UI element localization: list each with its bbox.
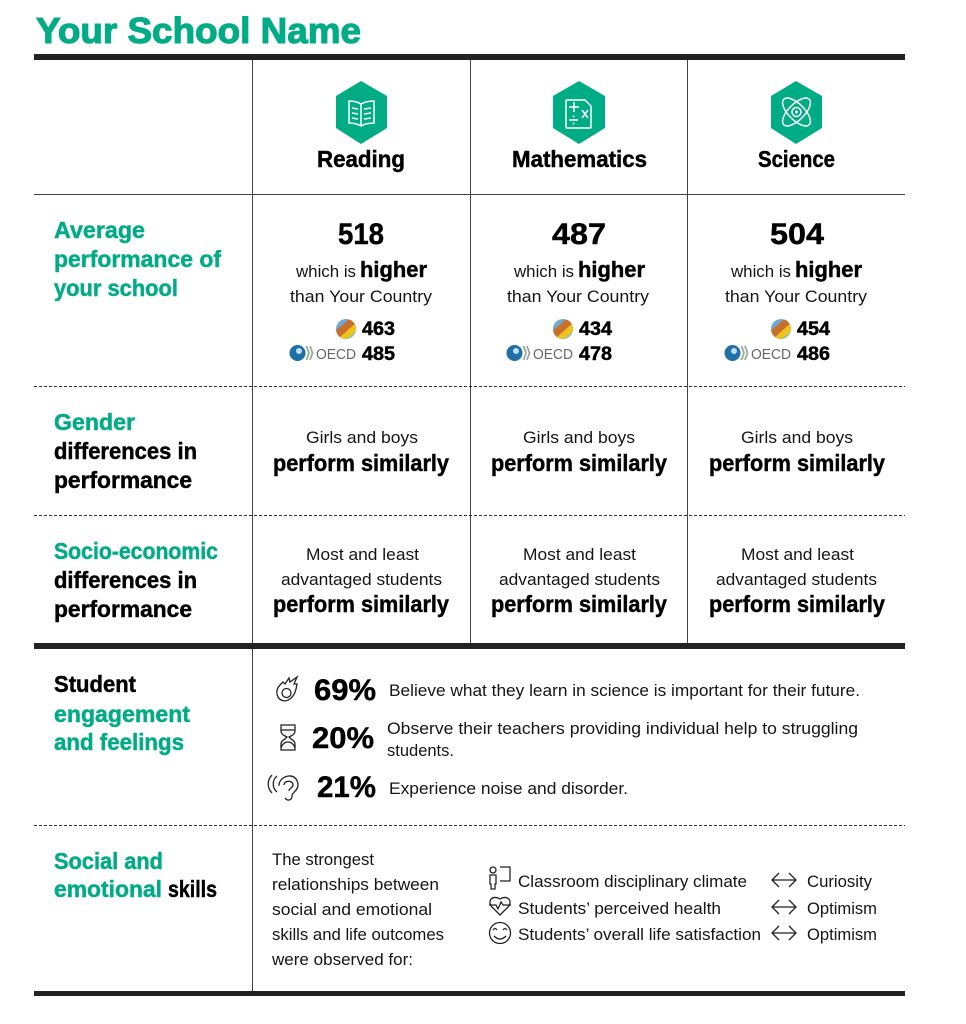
row heading: gender differences: Gender: [54, 409, 135, 435]
icon: OECD logo: [506, 345, 573, 363]
icon: ear: [268, 775, 298, 800]
engagement stat: 20%: students.: [387, 741, 454, 760]
column header: Science: [758, 81, 835, 172]
row heading: gender differences: performance: [54, 467, 192, 493]
icon: smiling face: [490, 923, 510, 944]
performance: Reading: 463: [362, 319, 395, 340]
performance: Mathematics: 478: [579, 344, 612, 365]
social and emotional intro text: [271, 850, 444, 969]
relationship: classroom climate and curiosity: Curiosity: [807, 872, 872, 891]
relationship: perceived health and optimism: Optimism: [807, 899, 877, 918]
performance: Reading: than Your Country: [290, 287, 433, 306]
relationship: life satisfaction and optimism: Students’ overall life satisfaction: [518, 925, 761, 944]
socio-economic: Reading: perform similarly: [273, 591, 449, 617]
icon: country flag: [553, 319, 573, 339]
performance: Science: [724, 218, 868, 365]
relationship: perceived health and optimism: Students’ perceived health: [518, 899, 721, 918]
socio-economic: Reading: Most and least: [306, 545, 419, 564]
socio-economic: Reading: advantaged students: [281, 570, 442, 589]
engagement stat: 69%: [277, 674, 860, 707]
relationship: classroom climate and curiosity: Classroom disciplinary climate: [518, 872, 747, 891]
row heading: socio-economic differences: differences in: [54, 567, 197, 593]
gender: Science: perform similarly: [709, 450, 885, 476]
performance: Science: 486: [797, 344, 830, 365]
engagement stat: 69%: Believe what they learn in science is important for their future.: [389, 681, 860, 700]
row heading: gender differences: [54, 409, 197, 493]
performance: Mathematics: 487: [552, 218, 606, 251]
icon: double arrow: [772, 926, 796, 940]
performance: Science: 504: [770, 218, 824, 251]
icon: maths sheet: [553, 81, 605, 144]
performance: Mathematics: which is: [513, 262, 574, 281]
gender: Mathematics: perform similarly: [491, 450, 667, 476]
gender: Mathematics: [491, 428, 667, 476]
performance: Reading: higher: [360, 257, 427, 282]
relationship: life satisfaction and optimism: [490, 923, 877, 944]
row heading: student engagement: engagement: [54, 701, 190, 727]
row heading: gender differences: differences in: [54, 438, 197, 464]
column header: Reading: [317, 81, 405, 172]
performance: Mathematics: higher: [578, 257, 645, 282]
performance: Mathematics: [506, 218, 650, 365]
engagement stat: 21%: Experience noise and disorder.: [389, 779, 628, 798]
row heading: social and emotional skills: skills: [168, 876, 217, 902]
socio-economic: Science: advantaged students: [716, 570, 877, 589]
engagement stat: 20%: Observe their teachers providing individual help to struggling: [387, 719, 858, 738]
row heading: student engagement: and feelings: [54, 729, 184, 755]
social and emotional intro text: social and emotional: [272, 900, 432, 919]
row heading: socio-economic differences: Socio-economic: [54, 538, 218, 564]
socio-economic: Mathematics: advantaged students: [499, 570, 660, 589]
socio-economic: Mathematics: Most and least: [523, 545, 636, 564]
socio-economic: Science: Most and least: [741, 545, 854, 564]
row heading: average performance: performance of: [54, 246, 221, 272]
performance: Science: than Your Country: [725, 287, 868, 306]
row heading: socio-economic differences: performance: [54, 596, 192, 622]
column header: Science: Science: [758, 146, 835, 172]
row heading: student engagement: [54, 671, 190, 755]
icon: OECD logo: [724, 345, 791, 363]
engagement stat: 20%: [281, 719, 858, 760]
row heading: social and emotional skills: [54, 848, 217, 902]
engagement stat: 21%: 21%: [317, 771, 376, 804]
performance: Reading: [290, 218, 433, 365]
column header: Reading: Reading: [317, 146, 405, 172]
row heading: social and emotional skills: emotional: [54, 876, 162, 902]
icon: OECD logo: OECD: [316, 346, 356, 363]
column header: Mathematics: Mathematics: [512, 146, 647, 172]
gender: Science: Girls and boys: [741, 428, 853, 447]
icon: OECD logo: OECD: [751, 346, 791, 363]
relationship: life satisfaction and optimism: Optimism: [807, 925, 877, 944]
icon: person at board: [490, 867, 510, 889]
social and emotional intro text: relationships between: [272, 875, 439, 894]
icon: double arrow: [772, 900, 796, 914]
title: Your School Name: [36, 10, 361, 51]
row heading: student engagement: Student: [54, 671, 136, 697]
icon: atom: [771, 81, 822, 144]
relationship: classroom climate and curiosity: [490, 867, 872, 891]
socio-economic: Mathematics: perform similarly: [491, 591, 667, 617]
performance: Mathematics: 434: [579, 319, 612, 340]
performance: Science: higher: [795, 257, 862, 282]
socio-economic: Mathematics: [491, 545, 667, 617]
social and emotional intro text: The strongest: [272, 850, 374, 869]
icon: OECD logo: [290, 345, 356, 363]
icon: hourglass: [281, 725, 295, 750]
performance: Reading: 485: [362, 344, 395, 365]
social and emotional intro text: were observed for:: [271, 950, 413, 969]
socio-economic: Science: [709, 545, 885, 617]
performance: Science: which is: [730, 262, 791, 281]
icon: heart with pulse: [489, 897, 511, 915]
engagement stat: 20%: 20%: [312, 722, 374, 755]
row heading: socio-economic differences: [54, 538, 218, 622]
icon: comet: [277, 677, 297, 701]
performance: Reading: which is: [295, 262, 356, 281]
performance: Reading: 518: [338, 218, 384, 251]
engagement stat: 21%: [268, 771, 628, 804]
engagement stat: 69%: 69%: [314, 674, 376, 707]
icon: country flag: [336, 319, 356, 339]
gender: Science: [709, 428, 885, 476]
icon: double arrow: [772, 873, 796, 887]
gender: Reading: Girls and boys: [306, 428, 418, 447]
performance: Science: 454: [797, 319, 830, 340]
socio-economic: Science: perform similarly: [709, 591, 885, 617]
row heading: average performance: Average: [54, 217, 145, 243]
gender: Reading: perform similarly: [273, 450, 449, 476]
performance: Mathematics: than Your Country: [507, 287, 650, 306]
row heading: average performance: [54, 217, 221, 301]
relationship: perceived health and optimism: [489, 897, 877, 918]
icon: OECD logo: OECD: [533, 346, 573, 363]
row heading: social and emotional skills: Social and: [54, 848, 163, 874]
gender: Mathematics: Girls and boys: [523, 428, 635, 447]
gender: Reading: [273, 428, 449, 476]
icon: open book: [336, 81, 387, 144]
column header: Mathematics: [512, 81, 647, 172]
social and emotional intro text: skills and life outcomes: [272, 925, 444, 944]
icon: country flag: [771, 319, 791, 339]
socio-economic: Reading: [273, 545, 449, 617]
row heading: average performance: your school: [54, 275, 178, 301]
